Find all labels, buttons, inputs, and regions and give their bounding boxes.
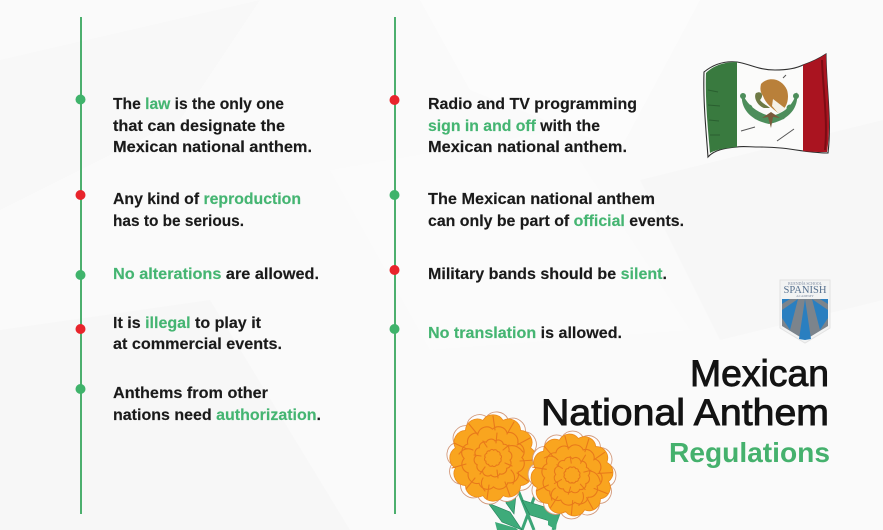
rule: the law: that can designate the: [113, 118, 285, 135]
title: Mexican: [690, 353, 829, 394]
rule: radio and tv: Mexican national anthem.: [428, 139, 627, 156]
icon: academy shield logo: ACADEMY: [796, 294, 814, 298]
rule: illegal: [113, 315, 282, 353]
illustration: marigold flowers: [442, 407, 636, 530]
rule: official events: [428, 191, 684, 230]
icon: academy shield logo: BUENDÍA SCHOOL: [788, 281, 823, 286]
rule: reproduction: Any kind of reproduction: [113, 191, 301, 208]
icon: academy shield logo: [780, 280, 830, 343]
rule: reproduction: has to be serious.: [113, 213, 244, 230]
rule: other anthems: [113, 385, 321, 424]
title: [541, 353, 829, 433]
rule: official events: The Mexican national anthem: [428, 191, 655, 208]
rule: no translation: No translation is allowed.: [428, 325, 622, 342]
rule: other anthems: nations need authorization.: [113, 407, 321, 424]
rule: illegal: at commercial events.: [113, 336, 282, 353]
icon: academy shield logo: SPANISH: [784, 285, 826, 296]
rule: reproduction: [113, 191, 301, 230]
rule: the law: The law is the only one: [113, 96, 284, 113]
rule: radio and tv: [428, 96, 637, 156]
rule: the law: Mexican national anthem.: [113, 139, 312, 156]
timeline: right: [390, 17, 400, 514]
rule: illegal: It is illegal to play it: [113, 315, 262, 332]
rule: radio and tv: sign in and off with the: [428, 118, 600, 135]
title: National Anthem: [541, 392, 829, 433]
rule: the law: [113, 96, 312, 156]
flower stems and leaves: [488, 489, 562, 530]
rule: other anthems: Anthems from other: [113, 385, 268, 402]
subtitle: Regulations: [669, 437, 830, 468]
timeline: left: [76, 17, 86, 514]
rule: no alterations: No alterations are allowed.: [113, 266, 319, 283]
flower: right: [508, 411, 636, 530]
rule: official events: can only be part of official events.: [428, 213, 684, 230]
flag emblem: [740, 79, 799, 128]
icon: mexican flag: [704, 54, 829, 157]
flower: left: [442, 407, 544, 509]
rule: military bands: Military bands should be silent.: [428, 266, 667, 283]
rule: radio and tv: Radio and TV programming: [428, 96, 637, 113]
